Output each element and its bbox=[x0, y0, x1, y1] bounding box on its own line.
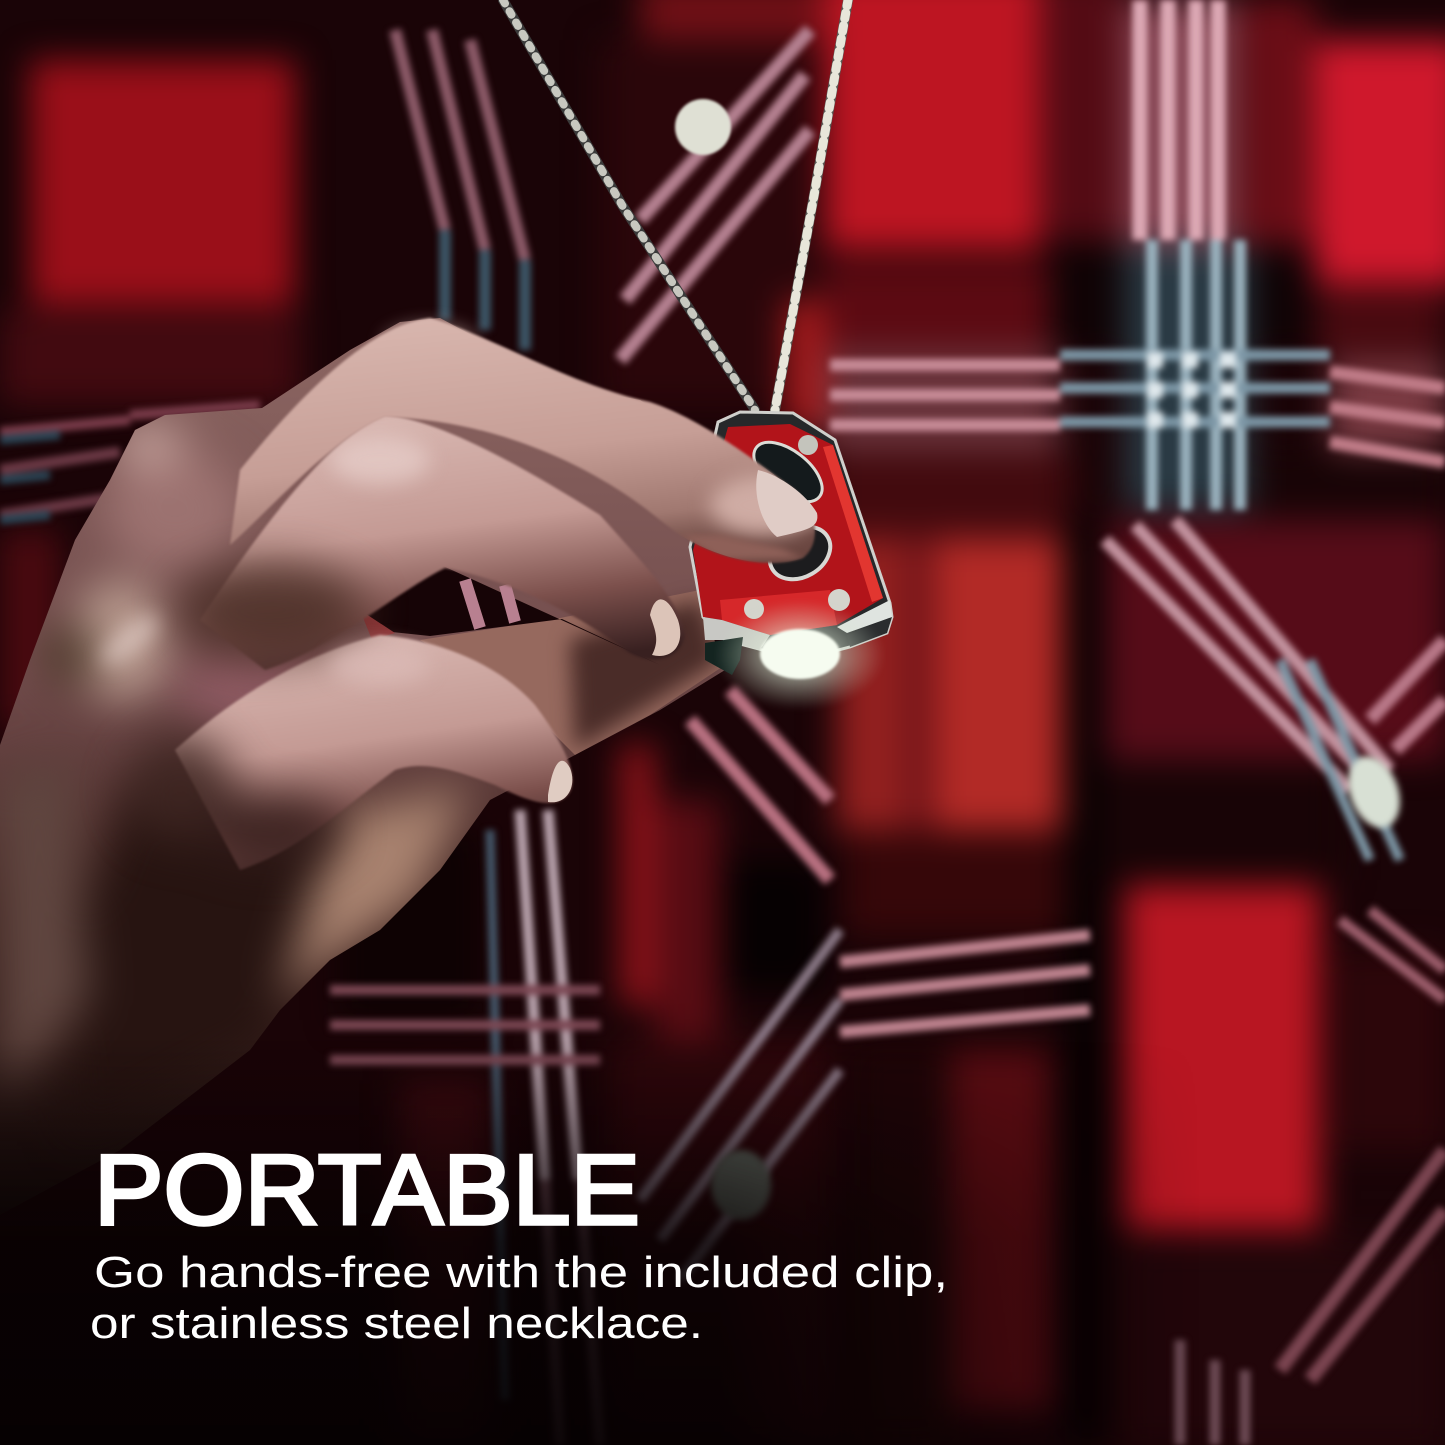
title: PORTABLE bbox=[94, 1134, 640, 1245]
index fingernail bbox=[756, 470, 817, 537]
device body bbox=[690, 412, 892, 660]
lower central stripes bbox=[520, 810, 578, 1180]
thumb bbox=[420, 590, 725, 755]
clip keychain light bbox=[690, 412, 892, 675]
clip bbox=[705, 637, 743, 675]
back of hand tones bbox=[105, 450, 245, 570]
ring finger bbox=[175, 635, 572, 870]
necklace chain bbox=[503, 0, 848, 410]
finger shadow transitions bbox=[125, 562, 365, 864]
index finger over device bbox=[230, 318, 820, 563]
bottom dark vignette bbox=[0, 1040, 1200, 1445]
horizontal plaid stripes bbox=[830, 365, 1060, 425]
shirt buttons bbox=[675, 99, 731, 155]
palm and wrist bbox=[0, 318, 724, 1156]
left top stripes bbox=[395, 30, 525, 260]
oval cutout bbox=[744, 431, 832, 513]
hand bbox=[0, 300, 740, 1230]
LED glow bbox=[715, 600, 885, 710]
vertical plaid stripes, top right bbox=[1140, 0, 1218, 240]
gap between middle finger and thumb bbox=[368, 566, 654, 662]
pocket stripes bbox=[1105, 520, 1390, 790]
hand knuckle highlights bbox=[95, 327, 475, 685]
description: Go hands-free with the included clip, bbox=[94, 1248, 948, 1297]
screws bbox=[798, 435, 818, 455]
power button bbox=[760, 516, 840, 590]
description: or stainless steel necklace. bbox=[90, 1299, 703, 1348]
middle finger bbox=[200, 415, 685, 670]
fingertip shading bbox=[680, 475, 820, 560]
description bbox=[90, 1248, 948, 1348]
bezel bbox=[837, 600, 892, 633]
fingernails bbox=[650, 599, 680, 656]
body highlights bbox=[823, 445, 883, 602]
